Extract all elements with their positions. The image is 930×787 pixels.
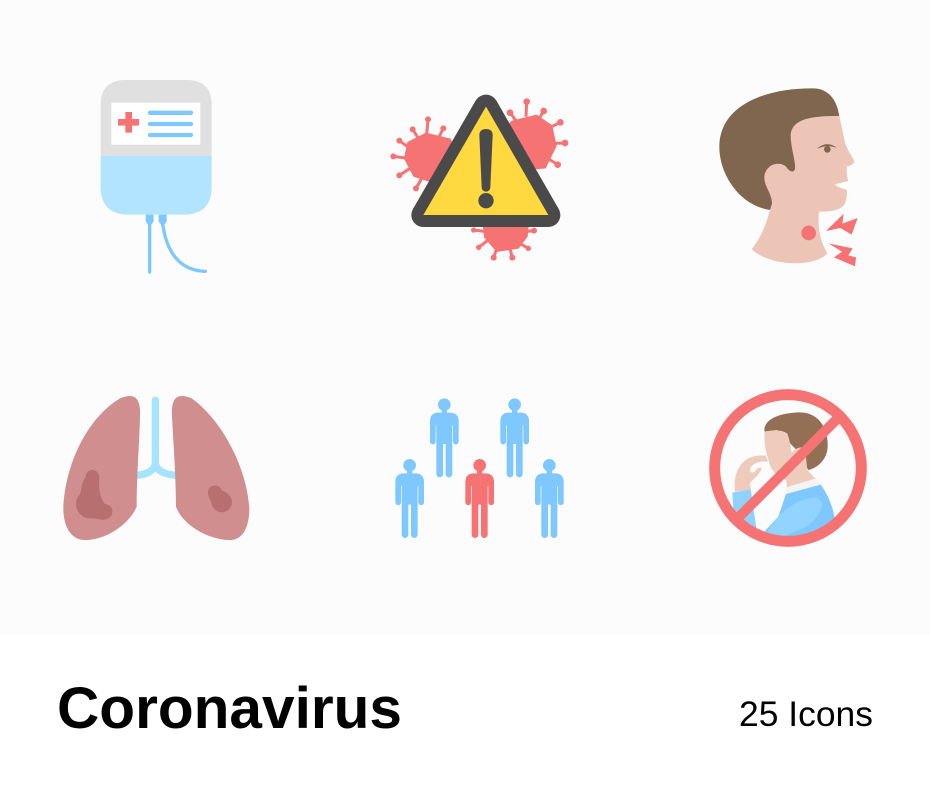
throat spot <box>801 226 816 240</box>
red cross <box>118 112 139 133</box>
footer title: Coronavirus <box>57 676 402 741</box>
exclamation mark <box>478 129 494 208</box>
tube connectors <box>146 215 167 225</box>
warning triangle <box>423 107 548 215</box>
hair <box>719 88 839 210</box>
man figure <box>732 412 835 540</box>
hair <box>764 412 828 470</box>
sleeve <box>732 489 757 530</box>
shirt highlight <box>763 498 822 537</box>
label lines <box>150 113 191 135</box>
tubes <box>150 223 205 272</box>
face and neck <box>752 116 854 263</box>
infected person <box>465 459 494 538</box>
icon: do not touch face <box>715 395 861 541</box>
right lung lesion <box>208 486 232 512</box>
virus spikes <box>393 102 565 258</box>
virus spike tips <box>390 98 568 261</box>
right lung <box>172 396 249 540</box>
virus bodies <box>404 115 557 252</box>
hand <box>735 456 768 492</box>
face and neck <box>764 430 816 490</box>
left lung <box>63 396 140 540</box>
icon: virus warning sign <box>390 98 568 261</box>
person <box>500 398 529 477</box>
icon: infected lungs <box>63 396 249 540</box>
icon: IV drip bag <box>101 80 212 272</box>
icon: group with one infected person <box>395 398 564 538</box>
prohibition ring <box>715 395 861 541</box>
left lung lesion <box>76 470 112 520</box>
infographic canvas <box>59 80 872 728</box>
shirt <box>764 484 834 536</box>
bag grey top <box>101 80 212 156</box>
bag fluid <box>101 156 212 215</box>
trachea <box>135 400 178 475</box>
bag label <box>111 103 200 145</box>
icon: sore throat head <box>719 88 858 266</box>
person <box>430 398 459 477</box>
eye <box>817 144 837 153</box>
person <box>395 459 424 538</box>
pain bolts <box>826 214 858 266</box>
person <box>535 459 564 538</box>
collar <box>787 478 816 490</box>
icon count: 25 Icons <box>739 695 873 734</box>
mouth <box>835 181 848 189</box>
